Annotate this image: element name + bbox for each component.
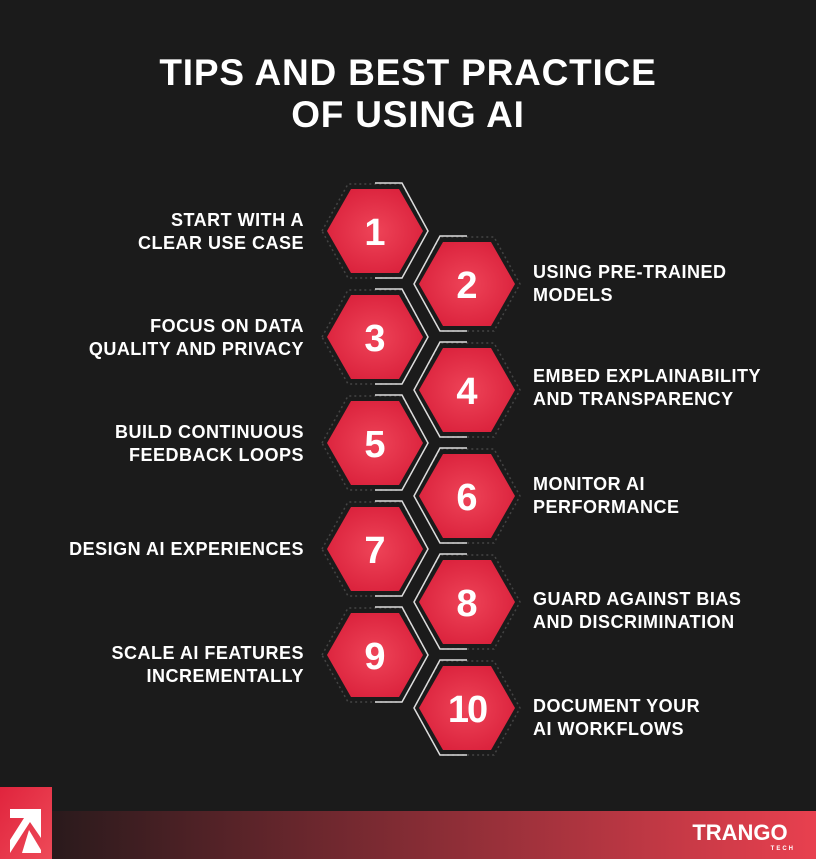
hex 2 (414, 236, 520, 331)
right labels: USING PRE-TRAINED (533, 262, 727, 282)
hex 4 (414, 342, 520, 437)
hex 1: 1 (364, 212, 386, 254)
right labels: EMBED EXPLAINABILITY (533, 366, 761, 386)
brand logo: TRANGO (692, 820, 788, 845)
hex 6 (414, 448, 520, 543)
left labels: DESIGN AI EXPERIENCES (69, 539, 304, 559)
hex 7 (322, 501, 428, 596)
title: TIPS AND BEST PRACTICE (159, 52, 657, 93)
right labels: AND TRANSPARENCY (533, 389, 734, 409)
hex 3 (322, 289, 428, 384)
right labels (533, 262, 761, 739)
brand logo: TECH (771, 846, 795, 852)
left labels (69, 210, 304, 686)
footer bar (52, 811, 816, 859)
hex 1 (322, 183, 428, 278)
right labels: AI WORKFLOWS (533, 719, 684, 739)
left labels: INCREMENTALLY (146, 666, 304, 686)
hex 5 (322, 395, 428, 490)
left labels: CLEAR USE CASE (138, 233, 304, 253)
hex 8 (414, 554, 520, 649)
title: OF USING AI (291, 94, 525, 135)
right labels: AND DISCRIMINATION (533, 612, 735, 632)
right labels: MONITOR AI (533, 474, 645, 494)
left labels: SCALE AI FEATURES (111, 643, 304, 663)
left labels: FOCUS ON DATA (150, 316, 304, 336)
right labels: DOCUMENT YOUR (533, 696, 700, 716)
title (159, 52, 657, 135)
left labels: BUILD CONTINUOUS (115, 422, 304, 442)
right labels: MODELS (533, 285, 613, 305)
hex 10: 10 (448, 689, 487, 731)
right labels: PERFORMANCE (533, 497, 680, 517)
hex 8: 8 (456, 583, 478, 625)
hex 9 (322, 607, 428, 702)
hex 2: 2 (456, 265, 478, 307)
hex 9: 9 (364, 636, 386, 678)
hex 5: 5 (364, 424, 386, 466)
hex 7: 7 (364, 530, 386, 572)
left labels: START WITH A (171, 210, 304, 230)
left labels: QUALITY AND PRIVACY (89, 339, 304, 359)
hex 6: 6 (456, 477, 478, 519)
right labels: GUARD AGAINST BIAS (533, 589, 741, 609)
hex 10 (414, 660, 520, 755)
left labels: FEEDBACK LOOPS (129, 445, 304, 465)
logo square icon (0, 787, 52, 859)
hex 4: 4 (456, 371, 478, 413)
hexagon chain (322, 183, 520, 755)
hex 3: 3 (364, 318, 386, 360)
